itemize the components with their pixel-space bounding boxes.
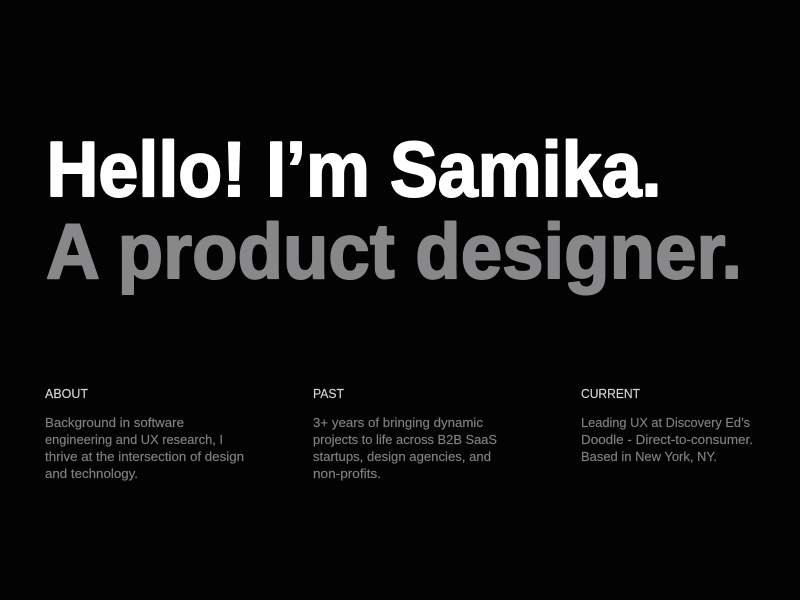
- heading: past: PAST: [313, 386, 344, 401]
- text block: current: Based in New York, NY.: [581, 449, 717, 464]
- text block: past: startups, design agencies, and: [313, 449, 491, 464]
- text block: about: thrive at the intersection of design: [45, 449, 244, 464]
- text block: about: [45, 415, 244, 481]
- title: greeting: Hello! I’m Samika.: [46, 125, 662, 213]
- text block: about: engineering and UX research, I: [45, 432, 223, 447]
- column: current: [581, 386, 753, 464]
- column: about: [45, 386, 244, 481]
- text block: past: 3+ years of bringing dynamic: [313, 415, 484, 430]
- text block: current: [581, 415, 753, 464]
- heading: current: CURRENT: [581, 386, 640, 401]
- text block: about: Background in software: [45, 415, 184, 430]
- text block: past: [313, 415, 497, 481]
- column: past: [313, 386, 497, 481]
- text block: past: projects to life across B2B SaaS: [313, 432, 497, 447]
- text block: past: non-profits.: [313, 466, 381, 481]
- text block: about: and technology.: [45, 466, 138, 481]
- subtitle: role: A product designer.: [46, 207, 742, 295]
- text block: current: Leading UX at Discovery Ed’s: [581, 415, 750, 430]
- text block: current: Doodle - Direct-to-consumer.: [581, 432, 753, 447]
- heading: about: ABOUT: [45, 386, 88, 401]
